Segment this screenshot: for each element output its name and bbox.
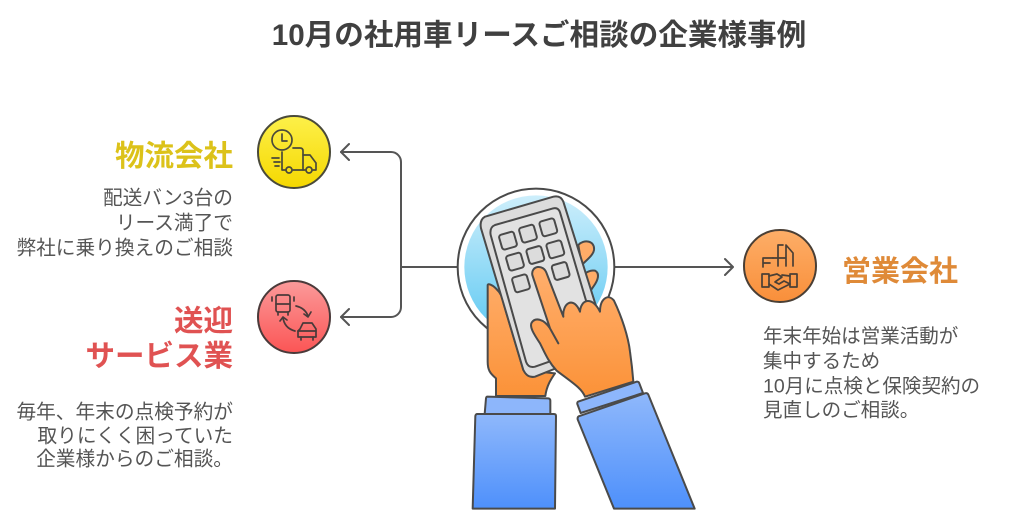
description: sales company: 見直しのご相談。 (763, 400, 919, 422)
connector arrows to left items (341, 144, 457, 325)
description: logistics company: リース満了で (116, 212, 233, 234)
sleeve left (473, 414, 556, 509)
description: sales company: 年末年始は営業活動が (763, 326, 959, 348)
heading: shuttle service: 送迎 (174, 305, 233, 338)
description: shuttle service: 取りにくく困っていた (38, 426, 233, 448)
heading: logistics company: 物流会社 (115, 140, 233, 173)
left hand (488, 284, 555, 396)
title: 10月の社用車リースご相談の企業様事例 (272, 18, 806, 52)
description: shuttle service: 企業様からのご相談。 (36, 448, 233, 470)
ring and light blue disc (458, 189, 614, 345)
sleeve right cuff (577, 382, 643, 413)
description: sales company: 10月に点検と保険契約の (763, 376, 980, 398)
heading: sales company: 営業会社 (842, 255, 958, 288)
description: logistics company: 配送バン3台の (103, 188, 233, 210)
description: shuttle service: 毎年、年末の点検予約が (16, 402, 233, 424)
description: logistics company: 弊社に乗り換えのご相談 (16, 238, 233, 260)
icon: delivery truck with clock (258, 116, 330, 188)
heading: shuttle service: サービス業 (85, 340, 233, 373)
item: logistics company (16, 116, 330, 260)
right hand (531, 267, 633, 397)
item: sales company (744, 230, 980, 422)
sleeve left cuff (485, 397, 550, 414)
description: sales company: 集中するため (763, 350, 880, 372)
icon: bus and car swap (258, 281, 330, 353)
item: shuttle service (16, 281, 330, 470)
arrow to right item (615, 259, 733, 275)
central illustration: hands holding phone (458, 189, 695, 509)
icon: buildings and handshake (744, 230, 816, 302)
phone (481, 196, 607, 377)
back fingers (574, 241, 598, 297)
sleeve right (578, 393, 695, 509)
